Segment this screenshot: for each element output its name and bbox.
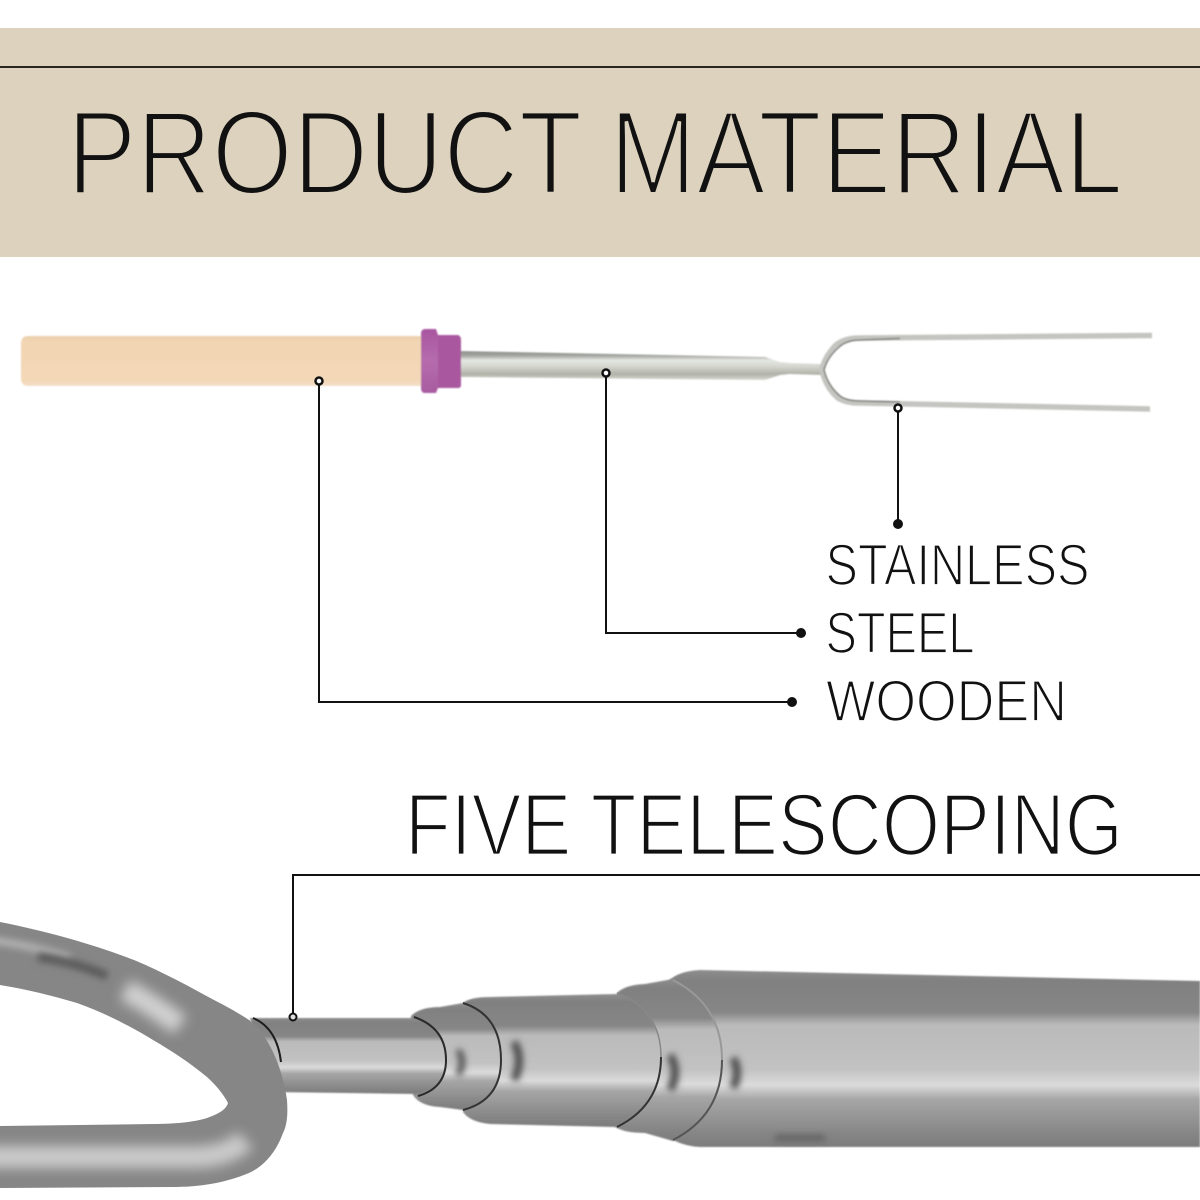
steel tube bbox=[458, 351, 822, 380]
loop shading bbox=[0, 940, 245, 1157]
label: wooden: WOODEN bbox=[826, 669, 1067, 734]
loop bbox=[0, 922, 287, 1188]
telescoping tube close-up bbox=[0, 922, 1200, 1188]
largest tube bbox=[665, 970, 1200, 1147]
callout lines bbox=[316, 370, 902, 706]
title banner bbox=[0, 28, 1200, 257]
wooden handle bbox=[21, 336, 424, 386]
small ring bbox=[411, 1003, 501, 1110]
purple collar bbox=[421, 329, 461, 393]
label: stainless: STAINLESS bbox=[826, 533, 1090, 598]
medium tube bbox=[463, 994, 661, 1127]
thinnest tube bbox=[250, 1018, 446, 1094]
label: steel: STEEL bbox=[826, 601, 974, 666]
third ring bbox=[615, 979, 722, 1141]
callout: wooden bbox=[319, 381, 792, 702]
fork tines bbox=[822, 336, 1152, 409]
marshmallow fork product diagram bbox=[21, 329, 1152, 409]
tube joint shadows bbox=[253, 980, 722, 1140]
callout: five telescoping bbox=[290, 875, 1200, 1020]
joint dark smudges bbox=[458, 1042, 825, 1138]
callout: steel bbox=[606, 373, 801, 633]
callout: stainless bbox=[897, 408, 899, 524]
